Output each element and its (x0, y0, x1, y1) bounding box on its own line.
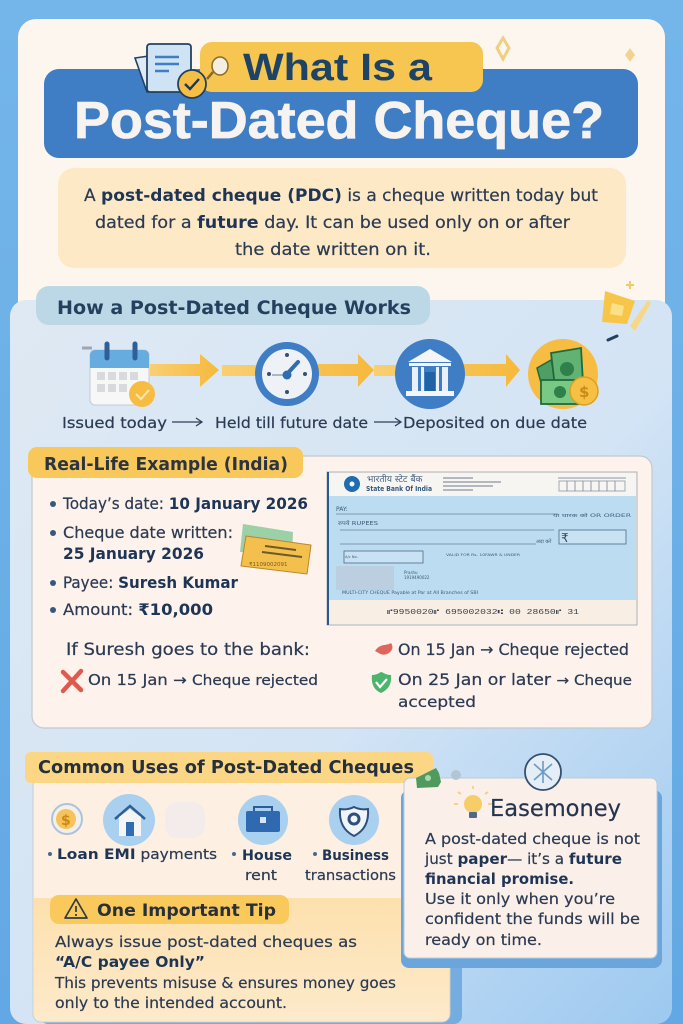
heading: real-life example (28, 447, 303, 478)
definition box: the date written on it. (235, 240, 431, 260)
outcome column right: On 15 Jan → Cheque rejected (398, 640, 629, 659)
step labels: Held till future date (215, 414, 368, 432)
section heading (36, 286, 430, 325)
tip text: Always issue post-dated cheques as (55, 933, 357, 951)
heading: important tip (50, 895, 289, 924)
step labels (62, 414, 587, 432)
illustration: bank cheque: भारतीय स्टेट बैंक (367, 473, 423, 485)
definition box (58, 168, 626, 268)
outcome column left (63, 640, 318, 691)
panel: common uses (25, 752, 462, 1024)
icon: spark badge (525, 754, 561, 790)
icon: house (103, 794, 155, 846)
title line one: What Is a (243, 47, 433, 89)
example facts list: Today’s date: 10 January 2026 (62, 494, 308, 513)
panel: real-life example (28, 447, 652, 728)
illustration: bank cheque: VALID FOR Rs. 10FAWR & UNDER (446, 552, 520, 557)
illustration: bank cheque: रुपये RUPEES (338, 520, 379, 527)
example facts list (50, 494, 308, 619)
example facts list: 25 January 2026 (63, 544, 204, 563)
icon: dollar coin: $ (61, 813, 71, 829)
takeaway text: ready on time. (425, 931, 542, 949)
uses labels (48, 847, 396, 884)
uses labels: Business (322, 848, 389, 864)
definition box: A post-dated cheque (PDC) is a cheque written today but (84, 186, 598, 206)
example facts list: Payee: Suresh Kumar (63, 573, 238, 592)
illustration: bank cheque: ⑈9950020⑈ 695002032⑆ 00 28650⑈ 31 (387, 609, 579, 617)
panel: easemoney takeaway (401, 754, 662, 968)
takeaway text (424, 830, 640, 949)
icon: clock (255, 342, 319, 406)
outcome column right: accepted (398, 693, 476, 711)
outcome column right: On 25 Jan or later → Cheque (398, 670, 632, 689)
icon: light bulb (454, 786, 492, 818)
illustration: bank cheque (327, 472, 637, 625)
icon: red mark (375, 643, 392, 655)
illustration: bank cheque: State Bank Of India (366, 484, 432, 493)
arrow: step three to four (374, 354, 520, 387)
takeaway text: just paper— it’s a future (424, 850, 622, 868)
uses labels: transactions (305, 868, 396, 884)
tip text: only to the intended account. (55, 994, 287, 1012)
tip text: This prevents misuse & ensures money goes (54, 974, 396, 992)
title banner (44, 69, 638, 158)
icon: briefcase (238, 795, 288, 845)
takeaway text: Use it only when you’re (425, 890, 615, 908)
uses labels: House (242, 848, 292, 864)
icon: shield (329, 795, 379, 845)
title line two: Post-Dated Cheque? (74, 92, 604, 150)
illustration: bank cheque: 1919490022 (404, 575, 430, 580)
uses labels: Loan EMI payments (57, 847, 217, 863)
takeaway text: financial promise. (425, 870, 574, 888)
title pill (200, 42, 483, 92)
outcome column right (372, 640, 632, 711)
example facts list: Cheque date written: (63, 523, 233, 542)
arrow: step two to three (222, 354, 374, 387)
icon: dollar coin (52, 804, 82, 834)
illustration: bank cheque: Prashu (404, 570, 418, 575)
step labels: Issued today (62, 414, 167, 432)
icon: calendar (82, 344, 155, 407)
icon: small cheque and notes: ₹1109002091 (249, 561, 288, 568)
outcome column left: If Suresh goes to the bank: (66, 640, 310, 659)
heading: important tip: One Important Tip (97, 901, 276, 921)
icon: small cheque and notes (240, 524, 311, 574)
section heading: How a Post-Dated Cheque Works (57, 297, 411, 319)
icon: small banknotes (416, 768, 461, 788)
panel: important tip (34, 895, 449, 1021)
icon: folded note decoration (602, 281, 651, 340)
heading: common uses: Common Uses of Post-Dated Cheques (38, 758, 414, 778)
outcome column left: On 15 Jan → Cheque rejected (88, 671, 318, 689)
illustration: bank cheque: अदा करें (536, 538, 552, 545)
sparkle large (497, 38, 509, 59)
illustration: bank cheque: ₹ (561, 531, 569, 545)
heading: real-life example: Real-Life Example (India) (44, 454, 288, 475)
lower panel (10, 300, 672, 1024)
icon: money and coin: $ (579, 383, 589, 401)
illustration: bank cheque: MULTI-CITY CHEQUE Payable at Par at All Branches of SBI (342, 590, 478, 596)
sparkle small (625, 48, 635, 62)
icon: green check shield (372, 672, 391, 693)
icon: document with check and magnifier (135, 44, 228, 98)
illustration: bank cheque: A/c No. (345, 555, 358, 559)
illustration: bank cheque: या धारक को OR ORDER (553, 512, 632, 519)
icon: red cross (63, 671, 81, 691)
takeaway text: confident the funds will be (425, 910, 640, 928)
definition box: dated for a future day. It can be used only on or after (95, 213, 570, 233)
icon: money and coin (528, 339, 598, 409)
step labels: Deposited on due date (403, 414, 587, 432)
heading: common uses (25, 752, 433, 783)
uses labels: rent (245, 868, 277, 884)
icon: bank (395, 339, 465, 409)
arrow: step one to two (150, 354, 219, 387)
example facts list: Amount: ₹10,000 (63, 600, 213, 619)
brand name: Easemoney (490, 796, 621, 822)
illustration: bank cheque: PAY: (336, 506, 348, 513)
how it works section (36, 281, 651, 432)
icon: faded ghost symbol (165, 802, 205, 838)
header card (18, 19, 665, 349)
takeaway text: A post-dated cheque is not (425, 830, 640, 848)
tip text: “A/C payee Only” (55, 953, 205, 971)
tip text (54, 933, 396, 1012)
